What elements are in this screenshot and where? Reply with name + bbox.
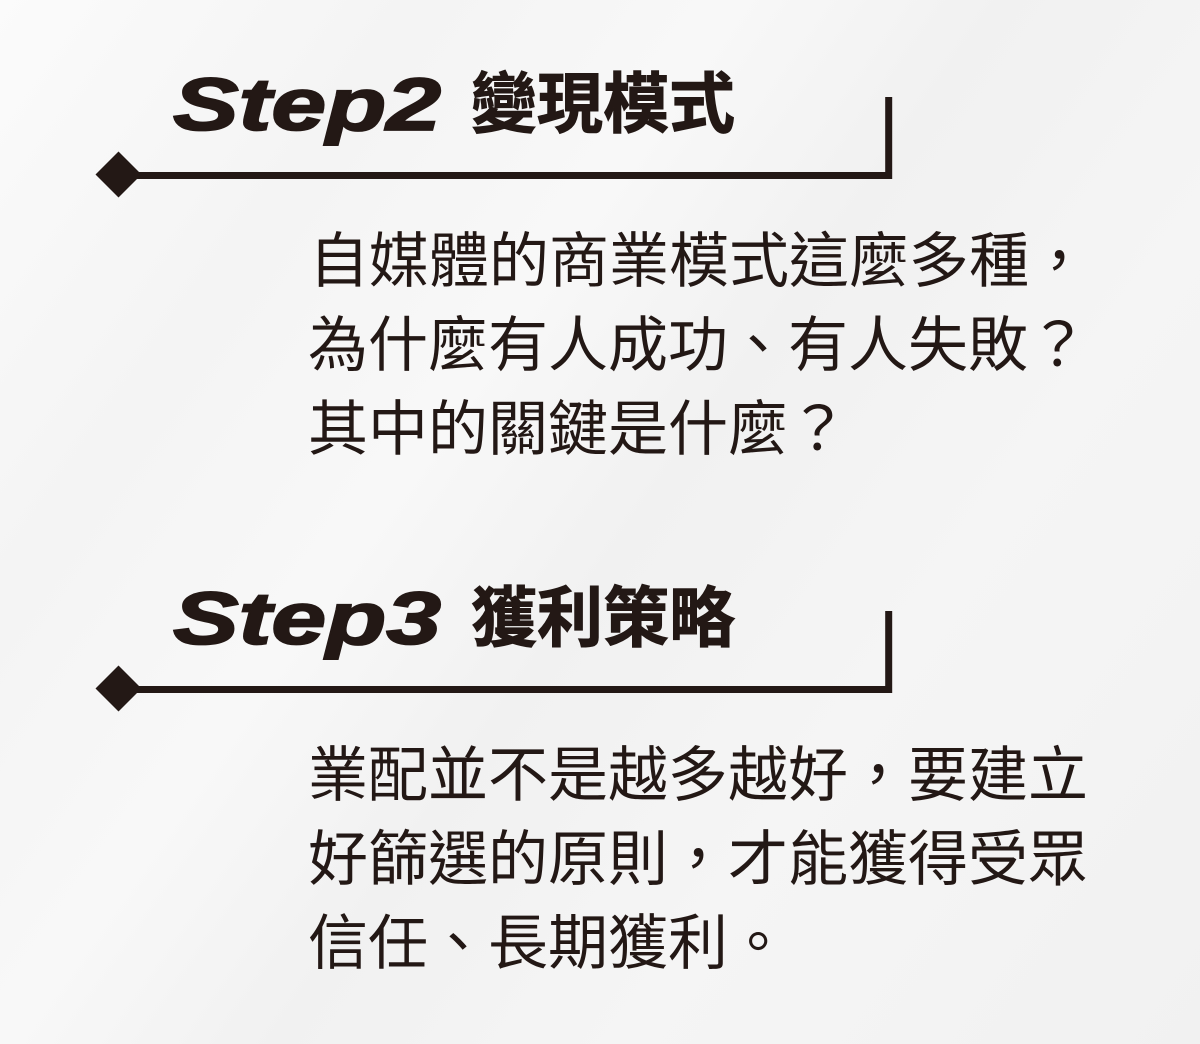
section: step 2 [96, 63, 1089, 463]
step 2 body text: 其中的關鍵是什麼？ [308, 396, 848, 463]
step 3 bracket with diamond [96, 611, 892, 712]
step 2 body text: 自媒體的商業模式這麼多種， [309, 228, 1089, 295]
step 3 body text: 業配並不是越多越好，要建立 [308, 742, 1088, 809]
step 2 heading: 變現模式 [471, 67, 735, 141]
step 2 body text [308, 228, 1089, 463]
step 2 body text: 為什麼有人成功、有人失敗？ [308, 312, 1088, 379]
step 3 body text [308, 742, 1088, 977]
step 3 label: Step3 [173, 577, 441, 660]
step 2 bracket with diamond [96, 97, 892, 198]
step 3 body text: 信任、長期獲利。 [308, 910, 788, 977]
section: step 3 [96, 577, 1088, 977]
step 3 heading: 獲利策略 [471, 581, 735, 655]
step 3 body text: 好篩選的原則，才能獲得受眾 [308, 826, 1088, 893]
step 2 label: Step2 [173, 63, 441, 146]
